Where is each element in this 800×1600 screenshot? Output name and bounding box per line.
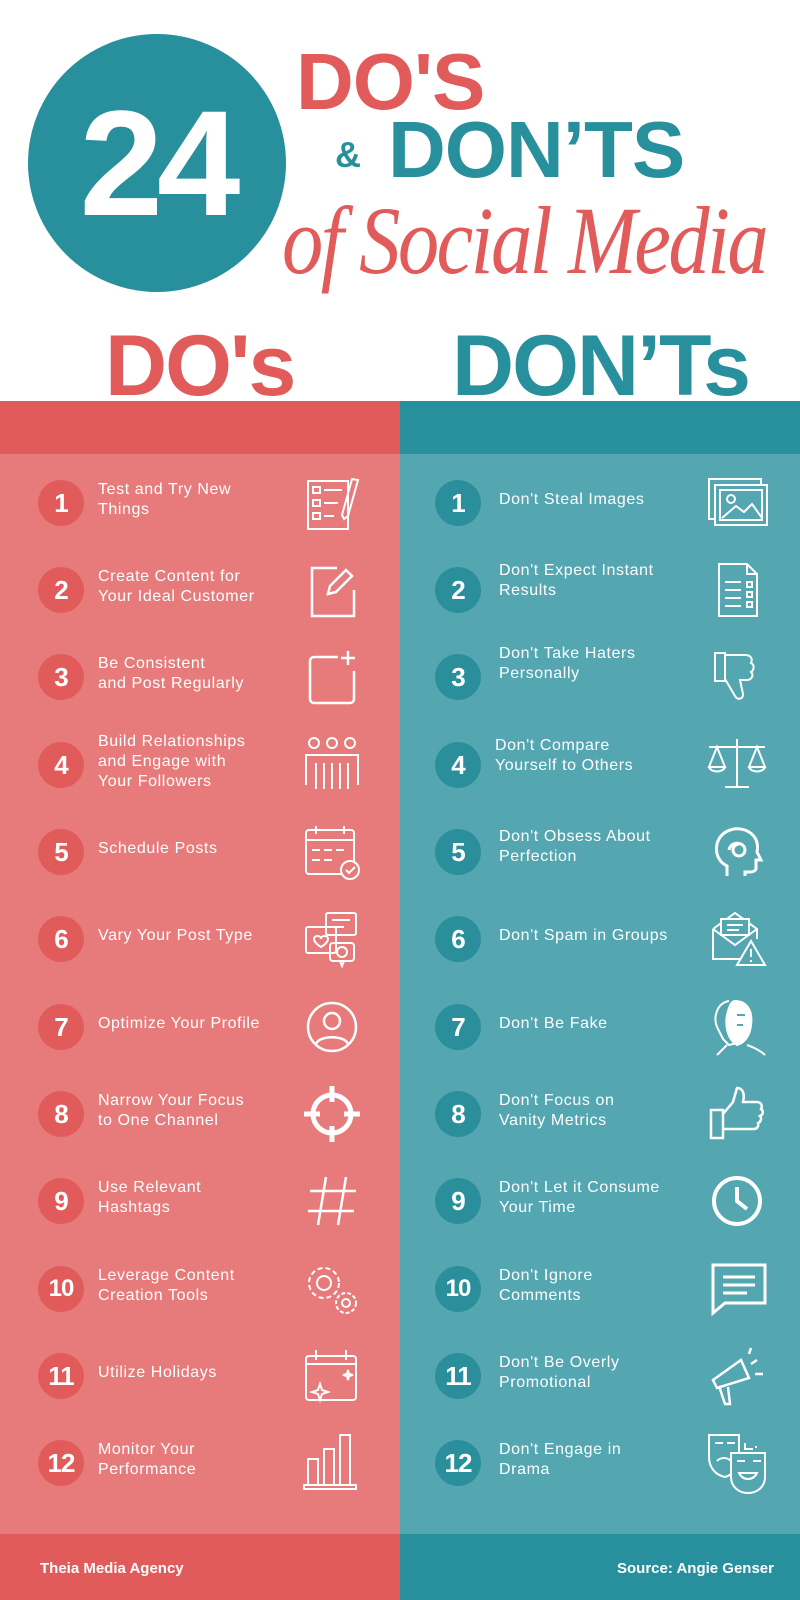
title: DON'TS: DON’TS: [388, 105, 684, 194]
do 1: Test and Try New: [98, 481, 231, 498]
do 7: Optimize Your Profile: [98, 1015, 260, 1032]
do 8: Narrow Your Focus: [98, 1092, 244, 1109]
do 12: [38, 1434, 357, 1490]
do 11: Utilize Holidays: [98, 1364, 217, 1381]
do 7: [38, 1002, 358, 1052]
do 9: [38, 1176, 356, 1226]
do 11: 11: [48, 1361, 74, 1391]
title: ampersand: &: [335, 134, 361, 175]
do 9: 9: [54, 1186, 68, 1216]
do 10: 10: [49, 1275, 73, 1302]
do 5: 5: [54, 837, 68, 867]
do 8: to One Channel: [98, 1112, 218, 1129]
do 6: 6: [54, 924, 68, 954]
dont 8: Don't Focus on: [499, 1092, 615, 1109]
dont 12: 12: [445, 1448, 471, 1478]
dont 8: Vanity Metrics: [499, 1112, 607, 1129]
do 5: Schedule Posts: [98, 840, 218, 857]
do 9: Hashtags: [98, 1199, 170, 1216]
dont 6: [435, 912, 767, 966]
do 2: Create Content for: [98, 568, 240, 585]
dont 9: 9: [451, 1186, 465, 1216]
do 10: Leverage Content: [98, 1267, 235, 1284]
do 3: Be Consistent: [98, 655, 205, 672]
do 3: [38, 651, 356, 704]
do 5: [38, 826, 360, 880]
dont 11: Don't Be Overly: [499, 1354, 620, 1371]
do 8: [38, 1086, 360, 1142]
dont 5: Perfection: [499, 848, 577, 865]
do 6: Vary Your Post Type: [98, 927, 253, 944]
do 11: [38, 1350, 357, 1403]
dont 10: 10: [446, 1275, 470, 1302]
dont 5: 5: [451, 837, 465, 867]
title: of Social Media: of Social Media: [282, 187, 766, 294]
dont 3: [435, 645, 755, 700]
do 4: 4: [54, 750, 68, 780]
do 6: [38, 912, 357, 968]
panel: dos background: [0, 454, 400, 1534]
dont 2: Don't Expect Instant: [499, 562, 654, 579]
dont 8: 8: [451, 1099, 465, 1129]
do 1: 1: [54, 488, 68, 518]
dont 2: Results: [499, 582, 557, 599]
dont 3: Don't Take Haters: [499, 645, 636, 662]
dont 9: [435, 1176, 762, 1226]
dont 1: [435, 478, 768, 526]
header circle: 24: [80, 79, 234, 247]
do 4: Build Relationships: [98, 733, 245, 750]
do 1: [38, 478, 360, 530]
dont 3: 3: [451, 662, 465, 692]
dont 9: Don't Let it Consume: [499, 1179, 660, 1196]
dont 11: 11: [445, 1361, 471, 1391]
header circle: [28, 34, 286, 292]
do 10: [38, 1266, 357, 1314]
dont 5: Don't Obsess About: [499, 828, 651, 845]
dont 10: Comments: [499, 1287, 581, 1304]
dont 1: Don't Steal Images: [499, 491, 644, 508]
dont 7: Don't Be Fake: [499, 1015, 608, 1032]
do 12: Monitor Your: [98, 1441, 195, 1458]
dont 4: Don't Compare: [495, 737, 610, 754]
title: DO'S: DO'S: [296, 37, 484, 126]
footer left: Theia Media Agency: [40, 1560, 184, 1577]
dont 10: Don't Ignore: [499, 1267, 593, 1284]
do 12: Performance: [98, 1461, 196, 1478]
footer right: Source: Angie Genser: [617, 1560, 774, 1577]
do 2: [38, 566, 356, 618]
do 2: 2: [54, 575, 68, 605]
do 4: Your Followers: [98, 773, 212, 790]
panel: dos list: [38, 478, 360, 1490]
do 12: 12: [48, 1448, 74, 1478]
dont 10: [435, 1264, 766, 1316]
dont 5: [435, 827, 764, 876]
do 4: [38, 733, 359, 790]
do 3: 3: [54, 662, 68, 692]
header bar right: [400, 401, 800, 454]
dont 8: [435, 1086, 764, 1140]
dont 1: 1: [451, 488, 465, 518]
dont 12: Don't Engage in: [499, 1441, 621, 1458]
footer right: [400, 1534, 800, 1600]
do 7: 7: [54, 1012, 68, 1042]
dont 12: Drama: [499, 1461, 550, 1478]
dont 7: [435, 1000, 766, 1056]
dont 4: Yourself to Others: [495, 757, 633, 774]
do 8: 8: [54, 1099, 68, 1129]
dont 11: Promotional: [499, 1374, 591, 1391]
dont 6: 6: [451, 924, 465, 954]
dont 2: [435, 562, 758, 617]
dont 2: 2: [451, 575, 465, 605]
do 10: Creation Tools: [98, 1287, 208, 1304]
dont 4: [435, 737, 766, 788]
dont 9: Your Time: [499, 1199, 576, 1216]
do 3: and Post Regularly: [98, 675, 244, 692]
do 4: and Engage with: [98, 753, 226, 770]
panel: donts background: [400, 454, 800, 1534]
header bar left: [0, 401, 400, 454]
dont 7: 7: [451, 1012, 465, 1042]
do 1: Things: [98, 501, 150, 518]
dont 12: [435, 1434, 766, 1494]
dont 3: Personally: [499, 665, 580, 682]
footer left: [0, 1534, 400, 1600]
do 2: Your Ideal Customer: [98, 588, 255, 605]
dont 11: [435, 1348, 763, 1406]
dont 4: 4: [451, 750, 465, 780]
dont 6: Don't Spam in Groups: [499, 927, 668, 944]
heading: DO's: DO's: [105, 318, 294, 414]
do 9: Use Relevant: [98, 1179, 201, 1196]
heading: DON'Ts: DON’Ts: [452, 318, 749, 414]
